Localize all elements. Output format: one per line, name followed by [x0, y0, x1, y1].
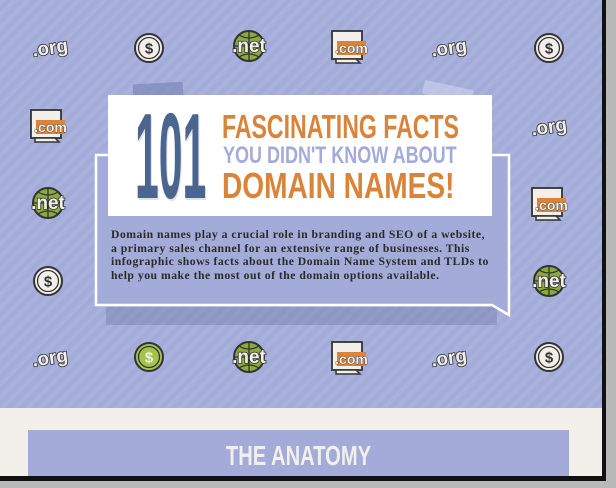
icon: dollar [34, 267, 62, 295]
icon: .org [430, 36, 468, 61]
icon: dollar green [135, 343, 163, 371]
tape pieces [133, 82, 183, 98]
icon: .net [31, 188, 66, 218]
intro text: a primary sales channel for an extensive range of businesses. This [111, 242, 470, 255]
icon: dollar [535, 343, 563, 371]
icon: .com [332, 31, 368, 63]
icon: .com [31, 110, 67, 142]
intro text [111, 228, 489, 282]
icon: .org [31, 346, 69, 371]
icon: .net [532, 266, 567, 296]
speech bubble shadow [106, 307, 497, 325]
icon: .net [232, 31, 267, 61]
title line 2: YOU DIDN'T KNOW ABOUT [223, 142, 457, 169]
title card [108, 95, 492, 216]
icon: .com [532, 188, 568, 220]
anatomy heading box [28, 430, 569, 476]
intro text: Domain names play a crucial role in branding and SEO of a website, [111, 228, 485, 241]
cream section [0, 408, 602, 476]
icon: .org [530, 115, 568, 140]
anatomy heading: THE ANATOMY [226, 440, 371, 471]
icon: dollar [135, 34, 163, 62]
icon: .net [232, 342, 267, 372]
intro text: infographic shows facts about the Domain Name System and TLDs to [111, 255, 489, 268]
number 101: 101 [135, 88, 206, 224]
title line 1: FASCINATING FACTS [222, 108, 459, 145]
intro text: help you make the most out of the domain options available. [111, 269, 440, 282]
title line 3: DOMAIN NAMES! [222, 165, 454, 206]
icon: dollar [535, 34, 563, 62]
icon: .org [31, 36, 69, 61]
icon: .org [430, 346, 468, 371]
icon: .com [332, 342, 368, 374]
